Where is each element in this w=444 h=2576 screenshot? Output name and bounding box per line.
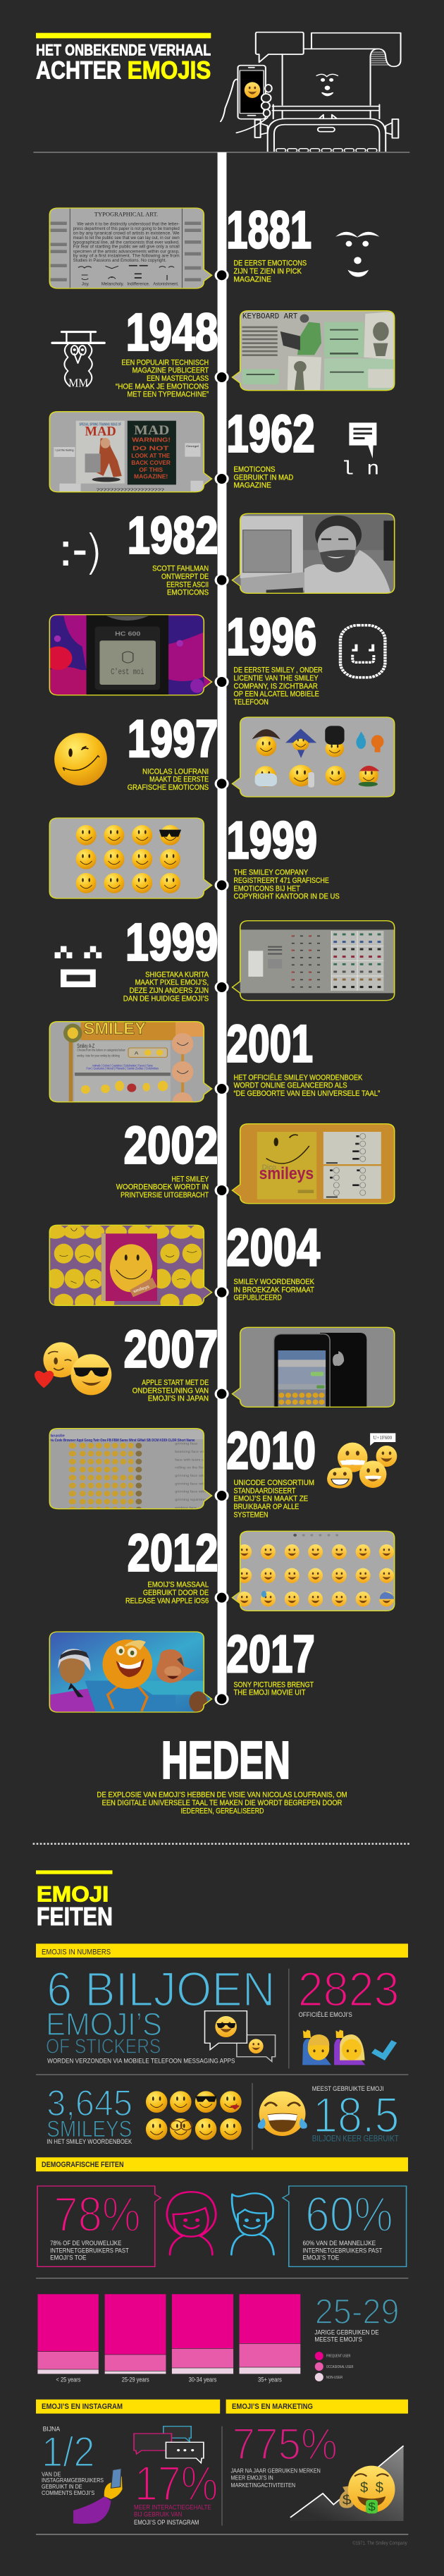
timeline spine	[218, 152, 226, 1699]
photo: Puck typographical art: Studies in Passions and Emotions. No copyright.	[73, 258, 166, 263]
panel: emojis in numbers	[36, 1962, 408, 2171]
heden paragraph: IEDEREEN, GEREALISEERD	[180, 1806, 264, 1815]
photo: MAD magazine covers: I put the feeling	[55, 448, 74, 451]
caption	[233, 868, 340, 901]
photo: iOS6 emoji keyboard	[230, 1530, 397, 1612]
photo: Unicode emoji table	[50, 1429, 211, 1508]
panel: instagram and marketing	[36, 2400, 408, 2546]
photo: online smiley dictionary: SMILEY	[84, 1019, 146, 1038]
stat: 775 percent: MARKETINGACTIVITEITEN	[230, 2482, 295, 2489]
entry: 2010	[48, 1422, 397, 1519]
caption: THE EMOJI MOVIE UIT	[233, 1688, 306, 1697]
caption: EEN POPULAIR TECHNISCH	[121, 358, 209, 367]
caption: MAAKT PIXEL EMOIJ’S,	[135, 978, 209, 987]
caption	[152, 564, 209, 597]
illustration: typewriter and phone	[221, 32, 401, 152]
stat: 6 biljoen: WORDEN VERZONDEN VIA MOBIELE TELEFOON MESSAGING APPS	[47, 2058, 235, 2065]
photo: registered emoticons grid	[48, 817, 214, 899]
photo: Unicode emoji table: rolling on the floor laughing	[175, 1466, 223, 1470]
entry: 2004	[49, 1224, 321, 1306]
entry: 2004: 2004	[226, 1219, 320, 1277]
caption: THE SMILEY COMPANY	[233, 868, 308, 877]
callout: 60 percent men: 60% VAN DE MANNELIJKE	[303, 2240, 376, 2247]
caption: APPLE START MET DE	[142, 1378, 209, 1387]
photo: Puck typographical art: specimen of the artistic advancements within our grasp,	[73, 250, 180, 254]
photo: Dico smileys book	[230, 1122, 397, 1204]
icon: man	[231, 2193, 274, 2254]
chart legend: FREQUENT USER	[326, 2355, 350, 2358]
stacked bar chart: 30-34 years	[189, 2376, 216, 2383]
photo: Puck typographical art: Melancholy.	[101, 282, 124, 286]
caption: MET EEN TYPEMACHINE”	[127, 390, 209, 398]
photo: Unicode emoji table: grinning face with big eyes	[175, 1474, 222, 1478]
icon: pixel emoji	[55, 946, 101, 987]
caption: HET SMILEY	[171, 1174, 209, 1183]
caption: SYSTEMEN	[233, 1510, 268, 1519]
entry: 1997	[54, 709, 397, 798]
callout: 60 percent men: EMOJI’S TOE	[303, 2254, 339, 2261]
caption: ZIJN TE ZIEN IN PICK	[233, 267, 302, 276]
stacked bar chart: 25-29 years	[122, 2376, 149, 2383]
stat: 6 biljoen: EMOJI’S	[46, 2006, 162, 2042]
photo: online smiley dictionary: Animals | Colors | Countries | Celebration | Faces | Fame	[92, 1064, 153, 1068]
photo: MAD magazine covers: MAD	[134, 422, 169, 438]
photo: MAD magazine covers: DO NOT	[132, 445, 169, 452]
photo: Puck typographical art	[48, 207, 214, 289]
photo: MAD magazine covers: ????????????????????	[97, 487, 165, 493]
caption	[233, 1478, 314, 1519]
caption	[233, 1073, 380, 1098]
photo: Puck typographical art: For fear of startling the public we will give only a small	[73, 245, 180, 249]
callout: 78 percent women: 78%	[54, 2187, 141, 2242]
heading: emoji feiten: EMOJI	[37, 1882, 109, 1907]
stat: 18.5: MEEST GEBRUIKTE EMOJI	[312, 2086, 383, 2093]
caption	[233, 666, 323, 707]
photo: The Emoji Movie	[48, 1631, 214, 1714]
entry: 2017: 2017	[226, 1625, 315, 1683]
entry: 1962	[48, 405, 379, 493]
icon: U+1F600 emoji group: U+1F600	[374, 1435, 392, 1441]
caption: EMOTICONS	[167, 588, 209, 597]
stat: 775 percent: JAAR NA JAAR GEBRUIKEN MERKEN	[230, 2467, 321, 2474]
heading: emoji feiten: FEITEN	[37, 1902, 113, 1931]
callout: 60 percent men	[283, 2186, 407, 2266]
icon: winking smiley	[54, 733, 107, 786]
chart legend: NON-USER	[326, 2376, 343, 2380]
stat: 775 percent: 775%	[232, 2419, 338, 2469]
caption: DE EERSTE SMILEY , ONDER	[233, 666, 323, 674]
icon: chat bubbles	[204, 2011, 276, 2061]
photo: Unicode emoji table: face with tears of joy	[175, 1458, 211, 1462]
stat: 6 biljoen: OF STICKERS	[46, 2034, 161, 2058]
icon: speech note with l n	[341, 422, 379, 481]
caption: GEBRUIKT IN MAD	[233, 472, 293, 482]
entry: 1999 Shigetaka Kurita	[55, 913, 397, 1003]
entry: 2010: 2010	[226, 1422, 316, 1480]
section bar: demografische feiten: DEMOGRAFISCHE FEITEN	[42, 2160, 124, 2169]
callout: 78 percent women: 78% OF DE VROUWELIJKE	[50, 2240, 121, 2247]
icon: selfie arm	[73, 2469, 123, 2524]
entry: 1881: 1881	[226, 201, 312, 260]
caption: UNICODE CONSORTIUM	[233, 1478, 314, 1487]
entry: 2012: 2012	[128, 1524, 218, 1582]
photo: online smiley dictionary: smiley. Vote for your smiley by clicking	[77, 1054, 120, 1058]
photo: Unicode emoji table: grinning face with sweat	[175, 1490, 218, 1494]
stat: 3,645 smileys: IN HET SMILEY WOORDENBOEK	[47, 2139, 132, 2146]
icon: typographic face	[335, 232, 379, 277]
photo: online smiley dictionary: Fun | Gestures | Mood | Planets | Saints Zodiac | Celebrities	[87, 1067, 159, 1070]
stat: 2823: 2823	[298, 1962, 400, 2017]
title block	[36, 33, 211, 85]
icon: U+1F600 emoji group	[327, 1433, 397, 1489]
chart legend	[315, 2352, 353, 2381]
stat: 1/2: 1/2	[42, 2428, 95, 2476]
caption: PRINTVERSIE UITGEBRACHT	[121, 1190, 209, 1200]
stat: 6 biljoen: 6 BILJOEN	[47, 1962, 276, 2017]
icon: check mark	[374, 2041, 394, 2057]
photo: Puck typographical art: TYPOGRAPHICAL ART.	[94, 211, 158, 217]
photo: Unicode emoji table: grinning face with smiling eyes	[175, 1482, 229, 1486]
photo: MAD magazine covers: MAGAZINE!	[134, 473, 168, 480]
section bar: emojis in numbers: EMOJIS IN NUMBERS	[42, 1947, 111, 1956]
caption: “HOE MAAK JE EMOTICONS	[116, 381, 209, 391]
stat: 18.5: 18.5	[313, 2087, 400, 2143]
caption: RELEASE VAN APPLE iOS6	[125, 1596, 209, 1605]
entry: 1962: 1962	[226, 405, 315, 463]
photo: iPhone	[230, 1326, 397, 1409]
stat: 3,645 smileys: SMILEYS	[47, 2116, 132, 2142]
icon: smiley grid	[146, 2091, 242, 2140]
caption: “DE GEBOORTE VAN EEN UNIVERSELE TAAL”	[233, 1089, 380, 1098]
stat: 6 biljoen	[46, 1962, 276, 2065]
caption: COPYRIGHT KANTOOR IN DE US	[233, 892, 340, 901]
entry: 1948	[52, 303, 397, 398]
icon: typed owl: MM	[68, 377, 88, 390]
photo: Puck typographical art: on by any tyranical crowd of artists in existence. We	[73, 231, 180, 236]
stat: 1/2: COMMENTS EMOJI’S	[42, 2490, 94, 2497]
icon: money emoji: $	[368, 2501, 376, 2513]
caption: EEN MASTERCLASS	[147, 374, 209, 383]
caption: GEBRUIKT DOOR DE	[143, 1588, 209, 1597]
photo: MAD magazine covers: WARNING!	[132, 437, 171, 444]
photo: online smiley dictionary: Choose from the letters or categories below	[77, 1049, 125, 1052]
caption: NICOLAS LOUFRANI	[142, 767, 209, 776]
entry: 2002	[116, 1116, 397, 1204]
stat: 1/2: INSTAGRAMGEBRUIKERS	[42, 2477, 104, 2484]
caption: DAN DE HUIDIGE EMOJI’S	[123, 994, 209, 1003]
photo: Scott Fahlman	[230, 512, 397, 594]
title block: HET ONBEKENDE VERHAAL	[36, 42, 211, 59]
photo: Unicode emoji table: grinning squinting face	[175, 1498, 215, 1502]
caption	[116, 358, 209, 398]
stat: 1/2	[42, 2426, 104, 2497]
credit: ©1971. The Smiley Company	[352, 2540, 407, 2546]
caption: HET OFFICIËLE SMILEY WOORDENBOEK	[233, 1073, 362, 1082]
section bar: instagram	[36, 2400, 220, 2414]
caption: BRUIKBAAR OP ALLE	[233, 1502, 299, 1511]
photo: online smiley dictionary	[50, 1022, 211, 1101]
stat: 17 percent	[134, 2456, 218, 2527]
caption: WORDT ONLINE GELANCEERD ALS	[233, 1081, 347, 1089]
photo: pocket smiley dictionary	[50, 1226, 211, 1305]
caption: EMOTICONS	[233, 465, 276, 474]
entry: 1982	[63, 506, 397, 597]
caption: SCOTT FAHLMAN	[152, 564, 209, 573]
photo: MAD magazine covers	[48, 410, 214, 493]
photo: MAD magazine covers: BACK COVER	[131, 460, 171, 467]
icon: money emoji: $	[343, 2493, 352, 2508]
photo: Unicode emoji table: grinning face	[175, 1442, 198, 1446]
section: heden	[97, 1731, 347, 1815]
stat: 775 percent: MEER EMOJI’S IN	[230, 2474, 273, 2482]
entry: 2017	[48, 1625, 315, 1714]
entry: 1881	[48, 201, 379, 289]
photo: MAD magazine covers: OF THIS	[139, 467, 164, 474]
line chart	[290, 2446, 404, 2521]
caption	[128, 767, 209, 792]
photo: Alcatel phone	[44, 614, 214, 697]
heden paragraph	[97, 1790, 347, 1815]
caption	[233, 1277, 314, 1302]
stat: 17 percent: 17%	[135, 2456, 218, 2511]
stat: 25-29	[314, 2292, 400, 2343]
photo: MAD magazine covers: George!	[186, 444, 199, 448]
caption	[233, 259, 307, 283]
entry: 1948: 1948	[126, 303, 218, 362]
caption	[116, 1174, 209, 1200]
callout: 78 percent women: INTERNETGEBRUIKERS PAST	[50, 2247, 129, 2254]
stat: 17 percent: BIJ GEBRUIK VAN	[134, 2511, 182, 2518]
caption: SONY PICTURES BRENGT	[233, 1680, 314, 1689]
stat: 1/2: VAN DE	[42, 2471, 61, 2478]
section bar: demografische feiten	[36, 2157, 408, 2171]
caption: SMILEY WOORDENBOEK	[233, 1277, 314, 1286]
entry: 1997: 1997	[128, 709, 218, 768]
caption: EMOJI’S IN JAPAN	[148, 1394, 209, 1403]
icon: money emoji: $	[360, 2479, 369, 2496]
photo: Puck typographical art: press department of this paper is not going to be trampled	[73, 226, 180, 231]
caption: REGISTREERT 471 GRAFISCHE	[233, 876, 329, 885]
entry: 1999 Smiley Company	[48, 811, 340, 901]
entry: 2001: 2001	[226, 1015, 313, 1073]
photo: online smiley dictionary: Smiley A-Z	[77, 1043, 95, 1049]
icon: pixel smiley	[340, 625, 385, 678]
photo: Puck typographical art: Indifference.	[127, 282, 150, 286]
caption: TELEFOON	[233, 697, 269, 707]
icon: speech note with l n: l n	[341, 459, 379, 481]
photo: Puck typographical art: by way of a first instalment. The following are from	[73, 254, 180, 258]
entry: 1996: 1996	[226, 608, 316, 666]
caption: EMOIJ’S EN MAAKT ZE	[233, 1494, 308, 1503]
section bar: marketing: EMOJI’S EN MARKETING	[232, 2402, 313, 2411]
photo: Unicode emoji table: beaming face with smiling eyes	[175, 1450, 230, 1454]
caption	[125, 1580, 209, 1605]
photo: online smiley dictionary: A	[135, 1050, 138, 1056]
entry: 2007	[35, 1327, 395, 1408]
heading: emoji feiten	[36, 1870, 113, 1931]
caption: SHIGETAKA KURITA	[145, 970, 209, 979]
caption: ONDERSTEUNING VAN	[132, 1386, 209, 1395]
panel: demographics	[36, 2186, 408, 2383]
caption: ONTWERPT DE	[161, 572, 209, 581]
caption: DEZE ZIJN ANDERS ZIJN	[130, 986, 209, 995]
caption: LICENTIE VAN THE SMILEY	[233, 673, 319, 683]
icon: apple emoji group	[35, 1342, 111, 1395]
caption: MAGAZINE PUBLICEERT	[132, 366, 209, 374]
title block: EMOJIS	[128, 56, 211, 85]
caption: OP EEN ALCATEL MOBIELE	[233, 690, 319, 698]
stat: 17 percent: EMOJI’S OP INSTAGRAM	[134, 2520, 199, 2527]
entry: 1999 Smiley Company: 1999	[226, 811, 317, 869]
caption: GRAFISCHE EMOTICONS	[128, 783, 209, 792]
photo: Puck typographical art: Joy.	[82, 282, 90, 286]
section bar: marketing	[226, 2400, 408, 2414]
caption: MAGAZINE	[233, 274, 271, 283]
caption: EERSTE ASCII	[166, 580, 209, 589]
icon: tears of joy	[258, 2092, 307, 2136]
callout: 78 percent women: EMOJI’S TOE	[50, 2254, 87, 2261]
photo: Unicode emoji table: winking face	[175, 1506, 197, 1510]
stat: 18.5: BILJOEN KEER GEBRUIKT	[312, 2134, 399, 2143]
stat: 775 percent	[230, 2419, 338, 2489]
photo: Unicode emoji table: face-positive	[51, 1434, 65, 1438]
caption: EMOTICONS BIJ HET	[233, 884, 300, 893]
caption	[132, 1378, 209, 1403]
caption: MAGAZINE	[233, 481, 271, 489]
photo: Keyboard Art magazine	[230, 309, 397, 391]
stat: 17 percent: MEER INTERACTIEGEHALTE	[134, 2504, 211, 2511]
stacked bar chart: 35+ years	[258, 2376, 282, 2383]
callout: 60 percent men: 60%	[305, 2187, 393, 2242]
caption	[233, 1680, 314, 1697]
caption: IN BROEKZAK FORMAAT	[233, 1285, 314, 1294]
photo: MAD magazine covers: LOOK AT THE	[131, 453, 171, 460]
stat: 1/2: GEBRUIKT IN DE	[42, 2484, 82, 2491]
stat: 2823: OFFICIËLE EMOJI’S	[298, 2011, 352, 2019]
icon: money emoji	[339, 2466, 395, 2513]
stacked bar chart	[37, 2294, 300, 2383]
icon: typed owl	[52, 332, 104, 390]
caption	[233, 465, 293, 489]
callout: 78 percent women	[37, 2186, 161, 2266]
chart legend: OCCASIONAL USER	[326, 2365, 353, 2369]
photo: graphic emoticons	[230, 716, 397, 798]
heden paragraph: EEN DIGITALE UNIVERSELE TAAL TE MAKEN DIE WORDT BEGREPEN DOOR	[102, 1798, 343, 1807]
caption	[123, 970, 209, 1003]
photo: pixel emoji exhibit	[240, 929, 394, 993]
caption: GEPUBLICEERD	[233, 1293, 282, 1302]
photo: pocket smiley dictionary: smileys	[132, 1285, 150, 1294]
heden paragraph: DE EXPLOSIE VAN EMOJI’S HEBBEN DE VISIE VAN NICOLAS LOUFRANIS, OM	[97, 1790, 347, 1799]
photo: Puck typographical art: mean to let the public see that we can lay out, in our own	[73, 236, 180, 240]
stat: 25-29: 25-29	[315, 2292, 400, 2331]
entry: 1996	[44, 608, 385, 707]
icon: money emoji: $	[376, 2479, 383, 2496]
stat: 3,645 smileys: 3,645	[47, 2083, 132, 2124]
photo: MAD magazine covers: SPECIAL SPRING TRAINING ISSUE OF	[80, 422, 121, 427]
callout: 60 percent men: INTERNETGEBRUIKERS PAST	[303, 2247, 383, 2254]
photo: Dico smileys book: Dico	[262, 1164, 276, 1171]
photo: Alcatel phone: C'est moi	[111, 667, 144, 677]
entry: 1999 Shigetaka Kurita: 1999	[125, 913, 218, 972]
stat: 25-29: JARIGE GEBRUIKEN DE	[314, 2329, 379, 2336]
stat: 25-29: MEESTE EMOJI’S	[314, 2336, 362, 2343]
caption: STANDAARDISEERT	[233, 1486, 296, 1495]
photo: Puck typographical art: Astonishment.	[153, 282, 179, 286]
caption: MAAKT DE EERSTE	[149, 775, 209, 783]
photo: Keyboard Art magazine: KEYBOARD ART	[242, 312, 297, 321]
caption: WOORDENBOEK WORDT IN	[116, 1183, 209, 1191]
photo: Unicode emoji table: № Code Browser Appl Goog Twtr One FB FBM Sams Wind GMail SB DCM KDDI CLDR Short Name	[51, 1439, 195, 1443]
stacked bar chart: < 25 years	[56, 2376, 81, 2383]
section bar: instagram: EMOJI’S EN INSTAGRAM	[42, 2402, 123, 2411]
photo: Dico smileys book: smileys	[259, 1164, 314, 1183]
header divider	[33, 152, 409, 153]
entry: 1982: 1982	[128, 506, 218, 565]
photo: MAD magazine covers: MAD	[85, 423, 116, 439]
caption: COMPANY, IS ZICHTBAAR	[233, 681, 318, 690]
photo: Puck typographical art: typographical line, all the cartoonists that ever walked.	[73, 240, 180, 245]
entry: 2012	[125, 1524, 397, 1612]
section bar: emojis in numbers	[36, 1943, 408, 1958]
title block: ACHTER	[36, 56, 121, 85]
icon: chat bubbles	[134, 2427, 204, 2463]
icon: woman	[167, 2192, 216, 2254]
caption: EMOIJ’S MASSAAL	[147, 1580, 209, 1589]
entry: 2002: 2002	[124, 1116, 218, 1175]
stat: 3,645 smileys	[47, 2083, 132, 2146]
stat: 1/2: BIJNA	[43, 2426, 60, 2433]
entry: 2001	[49, 1021, 380, 1103]
photo: Puck typographical art: We wish it to be distinctly understood that the letter-	[77, 222, 180, 226]
section: heden: HEDEN	[161, 1731, 290, 1790]
caption: DE EERST EMOTICONS	[233, 259, 307, 267]
entry: 2007: 2007	[124, 1320, 218, 1379]
icon: ascii smiley	[63, 532, 98, 575]
photo: Alcatel phone: HC 600	[115, 630, 140, 637]
icon: people raising hand	[302, 2029, 365, 2065]
